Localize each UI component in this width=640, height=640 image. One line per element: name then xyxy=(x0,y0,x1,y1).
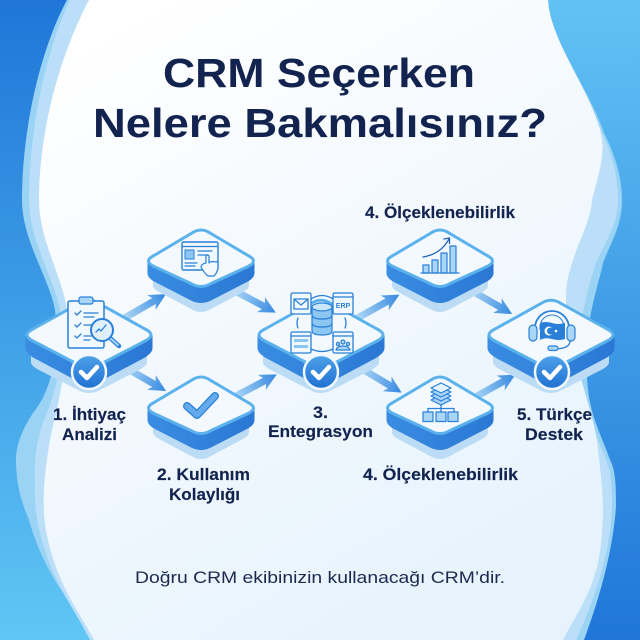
label: needs analysis: Analizi xyxy=(62,426,117,444)
title: CRM Seçerken xyxy=(163,50,475,96)
arrow: analysis to usability xyxy=(117,358,170,398)
arrow: integration to scalability bottom xyxy=(353,359,406,400)
label: ease of use: Kolaylığı xyxy=(169,486,240,504)
platform top xyxy=(148,230,254,312)
node 5: turkish support xyxy=(488,300,614,393)
label: turkish support: Destek xyxy=(525,426,584,444)
icon: headset with flag xyxy=(529,311,575,350)
check badge 5 xyxy=(535,355,569,389)
platform top right xyxy=(386,230,494,312)
arrow: scalability bottom to support xyxy=(466,367,520,407)
label: integration xyxy=(268,404,373,441)
node 2: ease of use xyxy=(148,377,254,459)
label: turkish support xyxy=(517,406,592,444)
arrow: scalability top to support xyxy=(463,281,516,321)
label: integration: Entegrasyon xyxy=(268,423,373,441)
label: scalability bottom: 4. Ölçeklenebilirlik xyxy=(363,465,519,484)
icon: check mark xyxy=(187,396,215,415)
node 1: needs analysis xyxy=(26,297,152,393)
footer tagline: Doğru CRM ekibinizin kullanacağı CRM’dir. xyxy=(135,568,505,587)
check badge 1 xyxy=(72,355,106,389)
label: ease of use: 2. Kullanım xyxy=(157,466,250,484)
platform 5 xyxy=(488,300,614,393)
platform bottom right xyxy=(386,377,494,459)
check badge 3 xyxy=(304,355,338,389)
node 4b: scalability layers xyxy=(386,377,494,459)
arrow: top node to integration xyxy=(226,281,280,320)
arrow: integration to scalability top xyxy=(350,287,404,327)
label: integration: 3. xyxy=(313,404,328,422)
icon: clipboard with magnifier xyxy=(68,297,119,348)
title: Nelere Bakmalısınız? xyxy=(93,100,547,146)
icon: stacked layers with hierarchy xyxy=(423,383,458,422)
arrow: usability to integration xyxy=(227,367,281,406)
node 3: integration xyxy=(258,293,384,393)
node 2a: interface xyxy=(148,230,254,312)
label: scalability top: 4. Ölçeklenebilirlik xyxy=(365,203,516,222)
label: ease of use xyxy=(157,466,250,504)
icon: database hub: ERP xyxy=(336,303,351,310)
title xyxy=(93,50,547,146)
platform 3 xyxy=(258,300,384,393)
node 4a: scalability chart xyxy=(386,230,494,312)
arrow: analysis to top node xyxy=(117,287,170,327)
platform bottom xyxy=(148,377,254,459)
label: needs analysis xyxy=(53,406,126,444)
label: turkish support: 5. Türkçe xyxy=(517,406,592,424)
icon: growth bar chart xyxy=(421,238,459,273)
icon: window with pointer hand xyxy=(182,242,218,276)
label: needs analysis: 1. İhtiyaç xyxy=(53,406,126,424)
platform 1 xyxy=(26,300,152,393)
